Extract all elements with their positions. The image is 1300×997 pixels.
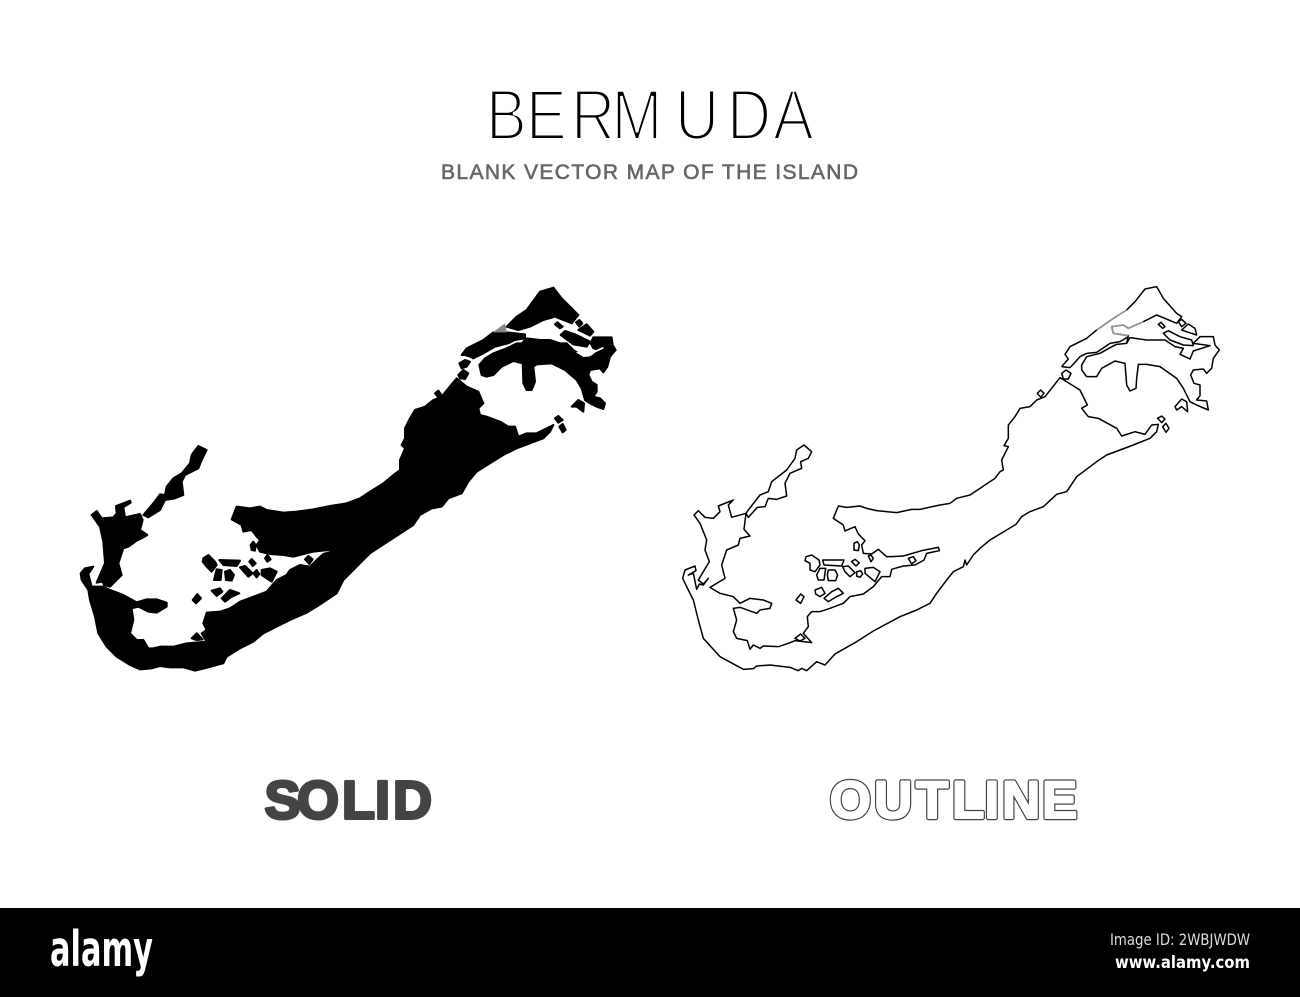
solid label: SOLID (264, 770, 432, 830)
outline label: OUTLINE (830, 771, 1077, 830)
outline map of Bermuda (683, 287, 1219, 671)
footer bar (0, 908, 1300, 997)
title: BERMUDA (486, 76, 814, 156)
solid map of Bermuda (81, 288, 616, 671)
alamy logo: alamy (50, 921, 153, 978)
subtitle: BLANK VECTOR MAP OF THE ISLAND (441, 161, 858, 184)
outline label: OUTLINE (830, 771, 1077, 830)
image id: Image ID: 2WBJWDW (1110, 930, 1250, 949)
website: www.alamy.com (1115, 953, 1250, 973)
